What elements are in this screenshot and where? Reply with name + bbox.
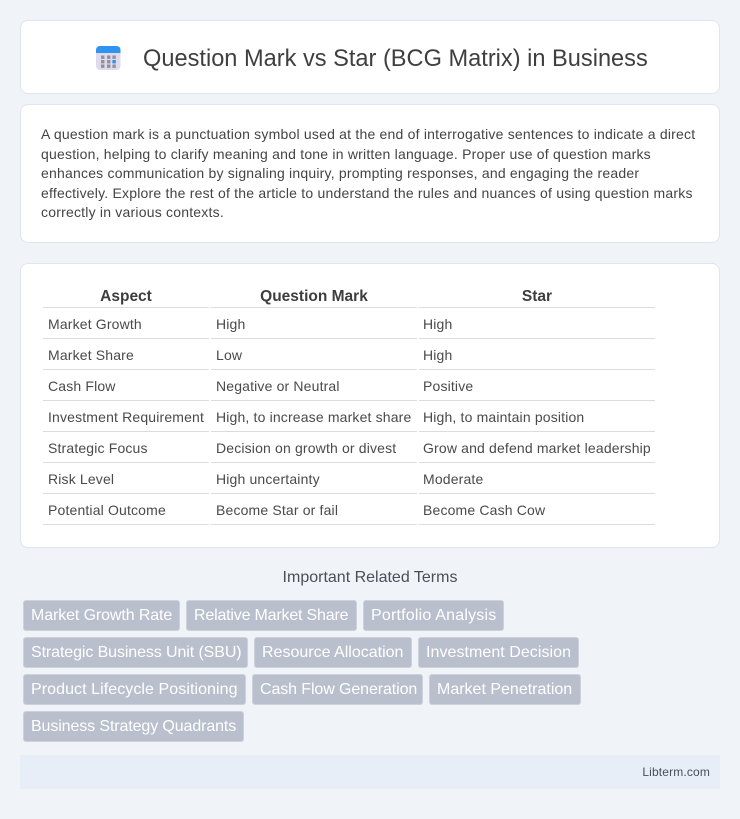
title: Question Mark vs Star (BCG Matrix) in Business [143,46,648,72]
row: market share: Market Share [48,347,134,363]
icon: calendar grid [96,46,120,70]
tag [23,674,246,705]
tag [252,674,423,705]
row: market growth: High [216,316,245,332]
row: cash flow: Cash Flow [48,378,116,394]
row: market growth: High [423,316,452,332]
tag [23,600,180,631]
row: strategic focus: Decision on growth or divest [216,440,396,456]
tag: Portfolio Analysis [371,607,496,624]
intro text: effectively. Explore the rest of the article to understand the rules and nuances of using question marks [41,184,693,200]
related term tags [23,600,581,742]
row: market growth: Market Growth [48,316,142,332]
row: market share: High [423,347,452,363]
tag [363,600,504,631]
row: investment requirement: High, to increase market share [216,409,411,425]
row: risk level: High uncertainty [216,471,320,487]
row: cash flow: Negative or Neutral [216,378,340,394]
row: risk level: Moderate [423,471,483,487]
footer [20,755,720,789]
tag [186,600,357,631]
row: potential outcome: Become Star or fail [216,502,338,518]
tag: Business Strategy Quadrants [31,718,236,735]
intro text: A question mark is a punctuation symbol used at the end of interrogative sentences to indicate a direct [41,126,695,142]
row: strategic focus: Grow and defend market leadership [423,440,651,456]
intro text [41,126,696,220]
tag [254,637,412,668]
related terms heading: Important Related Terms [283,569,457,586]
tag: Investment Decision [426,644,571,661]
row: cash flow: Positive [423,378,473,394]
row: potential outcome: Potential Outcome [48,502,166,518]
row: investment requirement: High, to maintain position [423,409,584,425]
row: market growth [48,316,452,332]
tag: Strategic Business Unit (SBU) [31,644,242,661]
tag: Cash Flow Generation [260,681,417,698]
intro text: enhances communication by signaling inquiry, prompting responses, and engaging the reader [41,165,639,181]
row: cash flow [48,378,473,394]
row: strategic focus: Strategic Focus [48,440,148,456]
row: potential outcome: Become Cash Cow [423,502,545,518]
tag: Market Growth Rate [31,607,172,624]
tag [23,637,248,668]
table headers: Star [522,288,552,305]
comparison table [43,288,655,525]
tag: Resource Allocation [262,644,403,661]
intro text: question, helping to clarify meaning and tone in written language. Proper use of question marks [41,146,651,162]
row: strategic focus [48,440,651,456]
table headers: Aspect [100,288,152,305]
table card [20,263,720,548]
header card [20,20,720,94]
intro text: correctly in various contexts. [41,204,224,220]
intro card [20,104,720,243]
row: potential outcome [48,502,546,518]
row: investment requirement: Investment Requirement [48,409,204,425]
tag: Market Penetration [437,681,572,698]
tag [23,711,244,742]
table headers [100,288,552,305]
row: risk level: Risk Level [48,471,114,487]
tag: Relative Market Share [194,607,348,624]
row: investment requirement [48,409,584,425]
row: risk level [48,471,483,487]
table headers: Question Mark [260,288,368,305]
row: market share [48,347,452,363]
footer source: Libterm.com [642,765,710,779]
tag [429,674,581,705]
row: market share: Low [216,347,242,363]
tag [418,637,579,668]
tag: Product Lifecycle Positioning [31,681,238,698]
